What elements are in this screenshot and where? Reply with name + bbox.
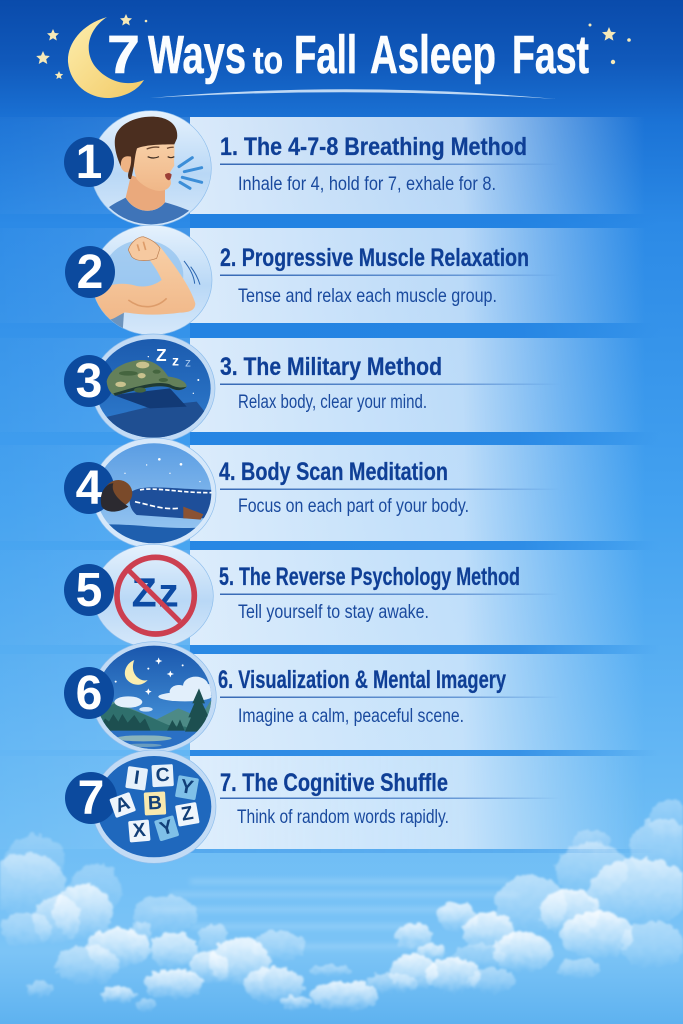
icon: no sleep sign: z — [158, 570, 179, 616]
badge: number 5 — [64, 564, 114, 617]
text: step 1: Inhale for 4, hold for 7, exhale for 8. — [238, 174, 496, 195]
badge: number 6: 6 — [76, 667, 102, 720]
heading: step 6: 6. Visualization & Mental Imagery — [218, 666, 506, 694]
icon: letter blocks: X — [132, 820, 147, 842]
title header — [36, 14, 631, 99]
icon: night disc with pillow: z — [172, 353, 179, 369]
badge: number 3: 3 — [76, 355, 102, 408]
icon: no sleep sign: Z — [132, 570, 157, 616]
heading: step 2: 2. Progressive Muscle Relaxation — [220, 244, 529, 272]
badge: number 6 — [64, 667, 114, 720]
panel: step 6 — [64, 642, 683, 756]
panel: step 2 — [65, 225, 683, 338]
heading: Fast — [512, 25, 589, 85]
panel: step 7 — [65, 750, 683, 863]
icon: person exhaling — [91, 111, 211, 228]
badge: number 1: 1 — [76, 136, 102, 189]
icon: military cap — [107, 360, 187, 396]
text: step 5: Tell yourself to stay awake. — [238, 602, 429, 623]
badge: number 7 — [65, 772, 117, 825]
heading: step 4: 4. Body Scan Meditation — [219, 458, 448, 486]
icon: letter blocks: B — [147, 793, 163, 814]
icon: letter blocks: Y — [178, 776, 195, 799]
icon: letter blocks: I — [133, 768, 141, 789]
panel: step 4 — [64, 438, 683, 550]
panel: step 1 — [64, 111, 683, 228]
badge: number 1 — [64, 136, 114, 189]
icon: letter blocks: Y — [157, 816, 176, 840]
icon: stars — [36, 14, 631, 79]
badge: number 5: 5 — [76, 564, 102, 617]
badge: number 2 — [65, 246, 115, 299]
badge: number 4 — [64, 462, 114, 515]
icon: calm night lake scene — [92, 642, 216, 754]
icon: night disc with pillow: Z — [156, 345, 167, 365]
clouds and sky streaks — [0, 800, 683, 1012]
badge: number 3 — [64, 355, 114, 408]
icon: crescent moon — [68, 17, 144, 98]
icon: letter blocks: Z — [180, 803, 195, 826]
icon: person lying down — [101, 480, 213, 520]
heading: step 7: 7. The Cognitive Shuffle — [220, 769, 448, 797]
panel: step 5 — [64, 544, 683, 654]
title swoosh — [150, 89, 556, 99]
heading: step 3: 3. The Military Method — [220, 353, 442, 381]
heading: to — [253, 40, 283, 82]
heading: 7 — [107, 25, 140, 85]
badge: number 4: 4 — [76, 462, 103, 515]
icon: letter blocks: C — [155, 765, 170, 786]
text: step 3: Relax body, clear your mind. — [238, 392, 427, 413]
badge: number 7: 7 — [78, 772, 104, 825]
heading: Ways — [148, 25, 246, 85]
heading: Fall — [294, 25, 357, 85]
heading — [107, 25, 589, 85]
pale left sky bands — [0, 117, 190, 849]
icon: flexed arm — [83, 225, 212, 335]
icon: starry disc with mattress — [92, 438, 217, 549]
icon: night disc with pillow: z — [185, 355, 191, 369]
badge: number 2: 2 — [77, 246, 103, 299]
text: step 2: Tense and relax each muscle group. — [238, 286, 497, 307]
icon: blue disc — [92, 750, 216, 863]
panel: step 3 — [64, 334, 683, 445]
icon: no sleep sign — [93, 544, 213, 648]
icon: letter blocks: A — [113, 793, 133, 817]
icon: letter blocks — [109, 764, 200, 842]
heading: step 5: 5. The Reverse Psychology Method — [219, 563, 520, 591]
text: step 6: Imagine a calm, peaceful scene. — [238, 706, 464, 727]
text: step 7: Think of random words rapidly. — [237, 807, 449, 828]
text: step 4: Focus on each part of your body. — [238, 496, 469, 517]
heading: Asleep — [370, 25, 496, 85]
icon: night disc with pillow — [92, 334, 215, 443]
heading: step 1: 1. The 4-7-8 Breathing Method — [220, 133, 527, 161]
